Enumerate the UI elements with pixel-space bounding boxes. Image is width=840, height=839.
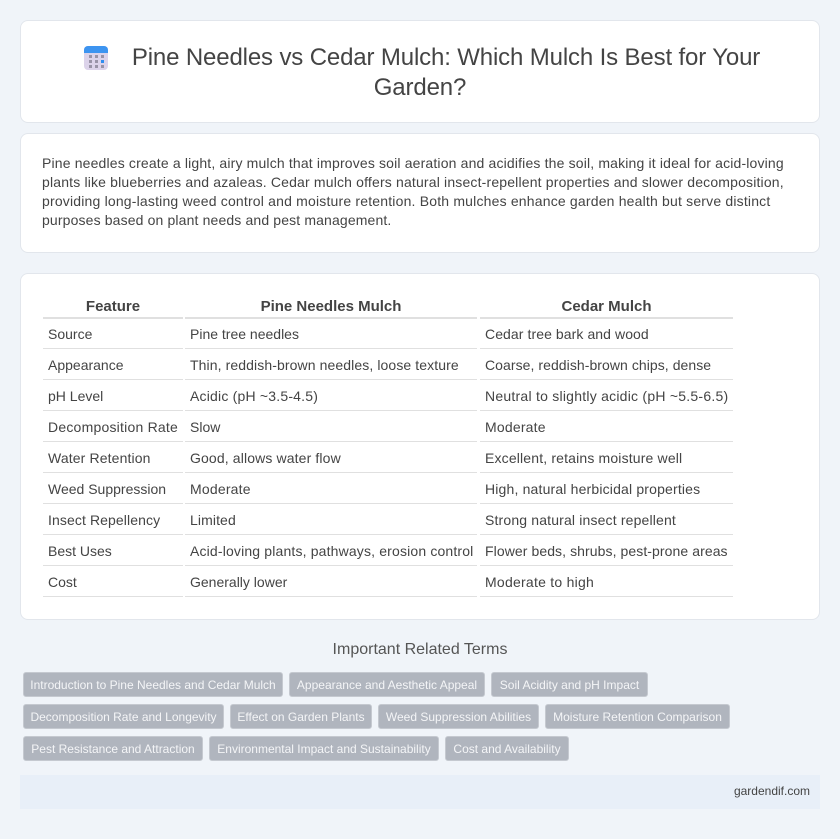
- comparison table: Strong natural insect repellent: [485, 512, 676, 528]
- column header: Pine Needles Mulch: Pine Needles Mulch: [261, 298, 401, 315]
- comparison table: Weed Suppression: [48, 481, 166, 497]
- comparison table: Neutral to slightly acidic (pH ~5.5-6.5): [485, 388, 728, 404]
- comparison table: Thin, reddish-brown needles, loose texture: [190, 357, 459, 373]
- title: Garden?: [374, 74, 466, 101]
- panel: title header: [20, 20, 820, 123]
- column header: Cedar Mulch: [480, 298, 733, 319]
- related term tags: Environmental Impact and Sustainability: [217, 742, 431, 756]
- related term tags: Decomposition Rate and Longevity: [30, 710, 217, 724]
- related term tags: Weed Suppression Abilities: [386, 710, 531, 724]
- intro paragraph: plants like blueberries and azaleas. Cedar mulch offers natural insect-repellent properties and slower decomposition,: [42, 174, 784, 190]
- intro paragraph: Pine needles create a light, airy mulch that improves soil aeration and acidifies the soil, making it ideal for acid-loving: [42, 155, 784, 171]
- comparison table: Moderate: [190, 481, 251, 497]
- comparison table: pH Level: [48, 388, 103, 404]
- comparison table: Generally lower: [190, 574, 287, 590]
- comparison table: Excellent, retains moisture well: [485, 450, 682, 466]
- comparison table: Best Uses: [48, 543, 112, 559]
- intro paragraph: purposes based on plant needs and pest management.: [42, 212, 391, 228]
- related term tags: Moisture Retention Comparison: [553, 710, 722, 724]
- column header: Pine Needles Mulch: [185, 298, 477, 319]
- comparison table: Decomposition Rate: [48, 419, 178, 435]
- title: [132, 44, 760, 101]
- comparison table: Acid-loving plants, pathways, erosion control: [190, 543, 473, 559]
- related term tags: Pest Resistance and Attraction: [31, 742, 195, 756]
- comparison table: Cost: [48, 574, 77, 590]
- related term tags: Cost and Availability: [453, 742, 561, 756]
- column header: Cedar Mulch: Cedar Mulch: [561, 298, 652, 315]
- comparison table: Coarse, reddish-brown chips, dense: [485, 357, 711, 373]
- comparison table: Insect Repellency: [48, 512, 160, 528]
- comparison table: Acidic (pH ~3.5-4.5): [190, 388, 318, 404]
- footer bar: gardendif.com: [734, 784, 810, 798]
- comparison table: Appearance: [48, 357, 124, 373]
- related term tags: Soil Acidity and pH Impact: [500, 678, 639, 692]
- icon: calendar: [84, 46, 108, 70]
- intro paragraph: providing long-lasting weed control and moisture retention. Both mulches enhance garden health but serve distinct: [42, 193, 770, 209]
- comparison table: Limited: [190, 512, 236, 528]
- footer bar: [20, 775, 820, 809]
- related term tags: Introduction to Pine Needles and Cedar Mulch: [30, 678, 276, 692]
- comparison table: Slow: [190, 419, 220, 435]
- comparison table: Water Retention: [48, 450, 151, 466]
- comparison table: High, natural herbicidal properties: [485, 481, 700, 497]
- related term tags: Effect on Garden Plants: [237, 710, 365, 724]
- comparison table: Flower beds, shrubs, pest-prone areas: [485, 543, 728, 559]
- title: Pine Needles vs Cedar Mulch: Which Mulch Is Best for Your: [132, 44, 760, 71]
- column header: Feature: Feature: [86, 298, 140, 315]
- intro paragraph: [42, 155, 784, 228]
- comparison table: Pine tree needles: [190, 326, 299, 342]
- panel: intro text: [20, 133, 820, 253]
- comparison table: Moderate to high: [485, 574, 594, 590]
- heading: related terms: Important Related Terms: [333, 641, 507, 658]
- comparison table: Source: [48, 326, 92, 342]
- comparison table: Moderate: [485, 419, 546, 435]
- comparison table: Cedar tree bark and wood: [485, 326, 649, 342]
- related term tags: Appearance and Aesthetic Appeal: [297, 678, 477, 692]
- column header: Feature: [43, 298, 183, 319]
- panel: comparison table: [20, 273, 820, 620]
- comparison table: Good, allows water flow: [190, 450, 341, 466]
